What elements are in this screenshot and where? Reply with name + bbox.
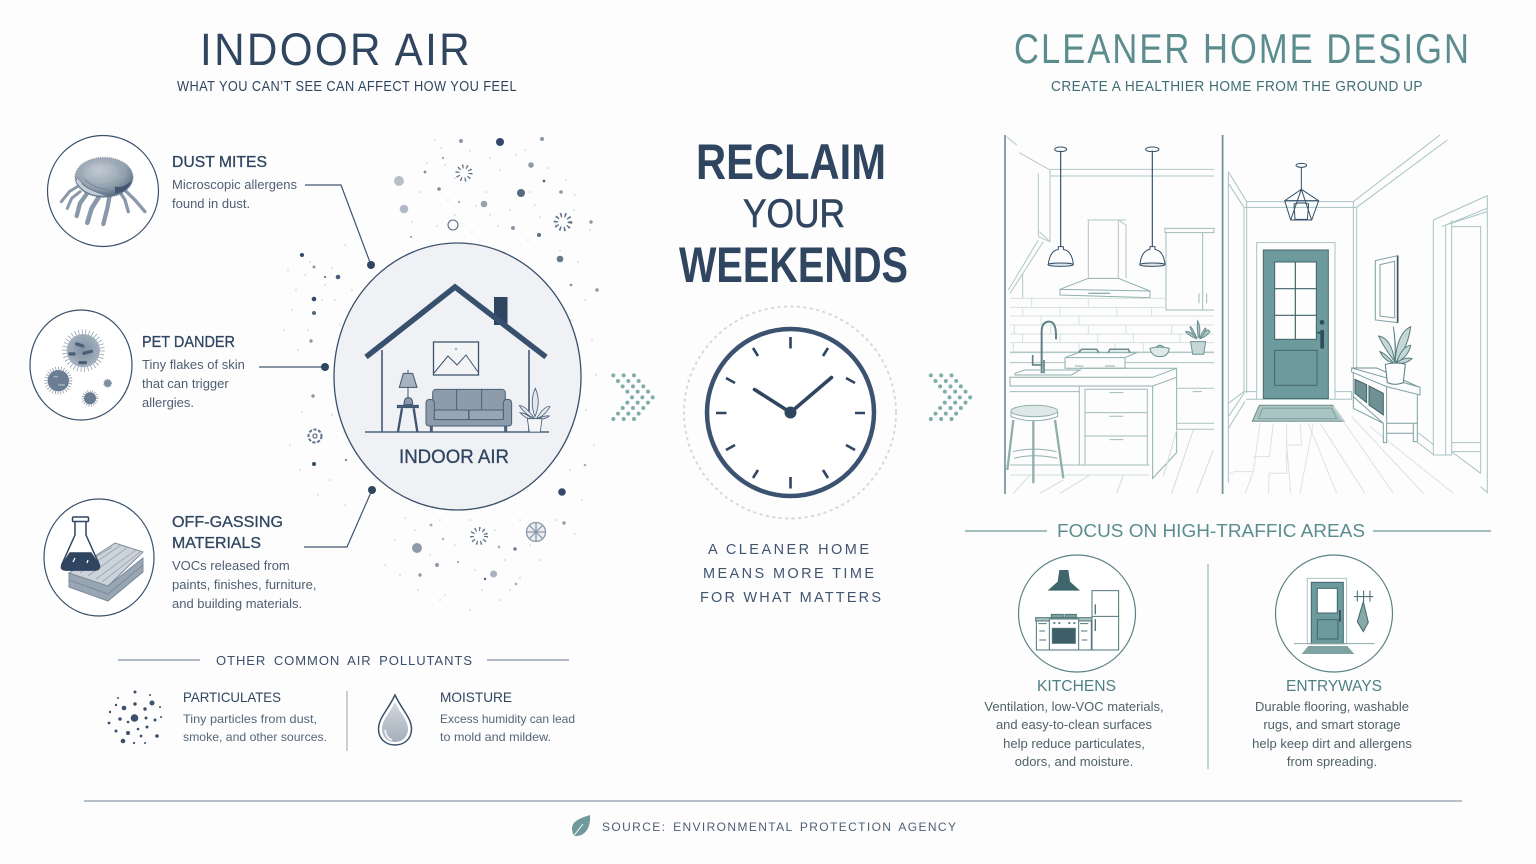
entryways text: rugs, and smart storage xyxy=(1263,717,1401,732)
subtitle: indoor air: WHAT YOU CAN’T SEE CAN AFFECT HOW YOU FEEL xyxy=(177,79,517,95)
water drop icon xyxy=(378,695,412,745)
kitchens text: help reduce particulates, xyxy=(1003,736,1145,751)
particulates heading: PARTICULATES xyxy=(183,689,281,705)
arrow: dotted chevron right xyxy=(931,375,970,419)
dust mite icon xyxy=(48,136,158,246)
dust mites text: Microscopic allergens xyxy=(172,177,297,192)
section heading: focus on high-traffic areas: FOCUS ON HIGH-TRAFFIC AREAS xyxy=(1057,521,1365,541)
entryways text: Durable flooring, washable xyxy=(1255,699,1409,714)
panel: kitchens xyxy=(984,555,1164,769)
panel: other common air pollutants xyxy=(108,653,575,751)
kitchens text: and easy-to-clean surfaces xyxy=(996,717,1153,732)
dust mites heading: DUST MITES xyxy=(172,154,267,171)
caption under clock: A CLEANER HOME xyxy=(708,542,869,558)
headline: reclaim your weekends xyxy=(679,134,908,293)
off-gassing text: and building materials. xyxy=(172,596,302,611)
section heading: OTHER COMMON AIR POLLUTANTS xyxy=(216,653,472,668)
flask xyxy=(62,517,100,570)
headline: reclaim your weekends: RECLAIM xyxy=(696,134,886,190)
house outline xyxy=(365,287,549,432)
illustration: entryway xyxy=(1223,135,1487,494)
title: indoor air: INDOOR AIR xyxy=(200,24,472,75)
headline: reclaim your weekends: YOUR xyxy=(743,192,845,236)
footer rule xyxy=(84,800,1462,802)
flask and wood icon xyxy=(44,499,154,616)
connector: pet dander xyxy=(259,363,329,371)
panel: entryways xyxy=(1252,555,1412,769)
icon: leaf xyxy=(572,815,590,838)
moisture text: to mold and mildew. xyxy=(440,730,551,744)
item: pet dander xyxy=(30,310,245,420)
wood boards xyxy=(69,543,143,601)
particulates text: smoke, and other sources. xyxy=(183,730,327,744)
off-gassing text: VOCs released from xyxy=(172,558,290,573)
divider xyxy=(1207,564,1209,769)
moisture text: Excess humidity can lead xyxy=(440,712,575,726)
entryway icon xyxy=(1276,555,1392,672)
connector: dust mites xyxy=(305,185,375,269)
off-gassing heading: OFF-GASSING xyxy=(172,514,283,531)
lamp and side table xyxy=(397,370,418,432)
arrow: dotted chevron left xyxy=(613,375,653,419)
caption under clock: FOR WHAT MATTERS xyxy=(700,590,881,606)
particle cloud around the house xyxy=(284,137,599,610)
big circle xyxy=(334,243,581,510)
kitchens text: odors, and moisture. xyxy=(1015,754,1133,769)
entryways heading: ENTRYWAYS xyxy=(1286,678,1382,695)
panel: house in indoor air circle xyxy=(334,243,581,510)
pet dander text: allergies. xyxy=(142,395,194,410)
dander icon xyxy=(30,310,132,420)
dust mites text: found in dust. xyxy=(172,196,250,211)
kitchen icon xyxy=(1018,555,1136,672)
pet dander text: that can trigger xyxy=(142,376,229,391)
picture xyxy=(434,342,478,375)
off-gassing text: paints, finishes, furniture, xyxy=(172,577,317,592)
entryways text: help keep dirt and allergens xyxy=(1252,736,1412,751)
kitchens heading: KITCHENS xyxy=(1037,678,1116,695)
pet dander heading: PET DANDER xyxy=(142,334,235,351)
particulates icon xyxy=(108,690,162,744)
item: dust mites xyxy=(48,136,297,246)
subtitle: cleaner home design: CREATE A HEALTHIER HOME FROM THE GROUND UP xyxy=(1051,79,1423,95)
off-gassing heading: MATERIALS xyxy=(172,535,261,552)
circle label: INDOOR AIR xyxy=(399,447,509,468)
source line: SOURCE: ENVIRONMENTAL PROTECTION AGENCY xyxy=(602,820,956,834)
pet dander text: Tiny flakes of skin xyxy=(142,357,245,372)
item: off-gassing materials xyxy=(44,499,317,616)
connector: off-gassing xyxy=(304,486,376,547)
divider xyxy=(346,691,348,751)
potted plant xyxy=(519,388,550,432)
illustration: kitchen xyxy=(1005,135,1223,494)
moisture heading: MOISTURE xyxy=(440,689,512,705)
sofa xyxy=(426,389,512,432)
clock xyxy=(684,306,896,518)
caption under clock: MEANS MORE TIME xyxy=(703,566,874,582)
particulates text: Tiny particles from dust, xyxy=(183,712,317,726)
headline: reclaim your weekends: WEEKENDS xyxy=(679,237,908,293)
kitchens text: Ventilation, low-VOC materials, xyxy=(984,699,1164,714)
entryways text: from spreading. xyxy=(1287,754,1377,769)
